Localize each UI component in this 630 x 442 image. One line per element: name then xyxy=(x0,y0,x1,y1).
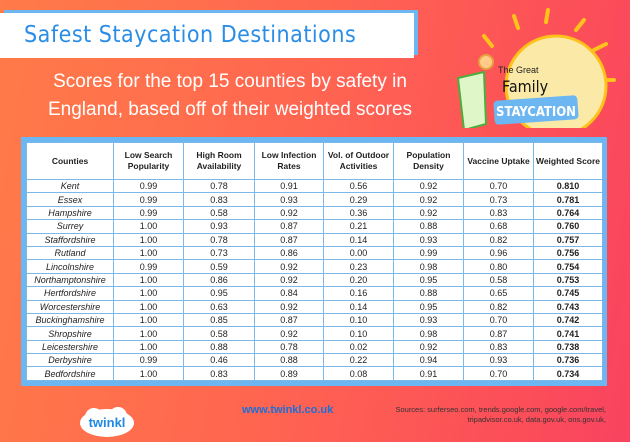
table: 0.95 xyxy=(420,302,437,312)
table: 0.73 xyxy=(490,195,507,205)
table: 0.86 xyxy=(280,248,298,258)
table: 0.73 xyxy=(210,248,228,258)
table: 0.21 xyxy=(350,221,367,231)
logo: great family staycation: Family xyxy=(502,77,549,96)
table: 0.89 xyxy=(280,369,298,379)
table: 0.753 xyxy=(557,275,579,285)
table: 1.00 xyxy=(140,275,157,285)
table: 0.82 xyxy=(490,302,507,312)
table: 0.92 xyxy=(420,342,437,352)
table: 0.93 xyxy=(280,195,298,205)
table: 0.98 xyxy=(420,262,437,272)
table: Vaccine Uptake xyxy=(467,156,530,166)
table: Hampshire xyxy=(48,208,92,218)
table: 0.22 xyxy=(350,355,367,365)
table: Population Density xyxy=(407,150,450,171)
table: 0.59 xyxy=(210,262,228,272)
table: Rutland xyxy=(54,248,86,258)
table: 1.00 xyxy=(140,235,157,245)
table: 0.99 xyxy=(140,262,157,272)
table: 0.756 xyxy=(557,248,579,258)
table: Hertfordshire xyxy=(44,288,96,298)
sources: tripadvisor.co.uk, data.gov.uk, ons.gov.uk, xyxy=(467,415,606,424)
twinkl logo xyxy=(80,407,134,437)
table: Bedfordshire xyxy=(44,369,96,379)
table: 0.08 xyxy=(350,369,367,379)
table: Low Search Popularity xyxy=(125,150,172,171)
title xyxy=(0,13,414,58)
table: 0.78 xyxy=(210,235,228,245)
table: 0.70 xyxy=(490,369,507,379)
table: 0.82 xyxy=(490,235,507,245)
table: 0.93 xyxy=(420,315,437,325)
table: 0.94 xyxy=(420,355,437,365)
table: 0.98 xyxy=(420,328,437,338)
table: Leicestershire xyxy=(42,342,98,352)
table: 0.742 xyxy=(557,315,579,325)
table: 0.23 xyxy=(350,262,367,272)
table: 0.88 xyxy=(420,288,437,298)
table: 0.736 xyxy=(557,355,579,365)
table: High Room Availability xyxy=(196,150,242,171)
website url: www.twinkl.co.uk xyxy=(242,404,333,416)
table: 0.56 xyxy=(350,181,367,191)
table: 0.99 xyxy=(420,248,437,258)
table: 0.87 xyxy=(280,221,298,231)
table: 0.83 xyxy=(210,369,228,379)
table: 0.734 xyxy=(557,369,579,379)
table: 0.78 xyxy=(280,342,298,352)
table: 0.92 xyxy=(280,302,298,312)
table: 0.36 xyxy=(350,208,367,218)
table: 0.78 xyxy=(210,181,228,191)
table: 0.738 xyxy=(557,342,579,352)
logo: great family staycation xyxy=(456,8,616,128)
table: 0.757 xyxy=(557,235,579,245)
table: 0.70 xyxy=(490,315,507,325)
table: 1.00 xyxy=(140,328,157,338)
table: 0.83 xyxy=(490,208,507,218)
table: Lincolnshire xyxy=(46,262,94,272)
table: 0.99 xyxy=(140,208,157,218)
table: 1.00 xyxy=(140,315,157,325)
table: 0.88 xyxy=(280,355,298,365)
table: 0.83 xyxy=(490,342,507,352)
table: 1.00 xyxy=(140,288,157,298)
table: Worcestershire xyxy=(40,302,100,312)
table: 0.99 xyxy=(140,195,157,205)
sources xyxy=(395,405,606,424)
table: Kent xyxy=(61,181,79,191)
table: 0.87 xyxy=(280,235,298,245)
table: Shropshire xyxy=(48,328,92,338)
logo: great family staycation: The Great xyxy=(498,65,539,75)
table: Weighted Score xyxy=(536,156,600,166)
table: 0.95 xyxy=(210,288,228,298)
table: 0.96 xyxy=(490,248,507,258)
table: 0.741 xyxy=(557,328,579,338)
table: Counties xyxy=(52,156,88,166)
table: 0.781 xyxy=(557,195,579,205)
table: 0.80 xyxy=(490,262,507,272)
table: 0.46 xyxy=(210,355,228,365)
table: 0.745 xyxy=(557,288,579,298)
table: 0.63 xyxy=(210,302,228,312)
table: Staffordshire xyxy=(44,235,96,245)
table: Northamptonshire xyxy=(34,275,106,285)
table: 0.93 xyxy=(490,355,507,365)
table: 0.93 xyxy=(420,235,437,245)
table: 0.83 xyxy=(210,195,228,205)
table: 0.88 xyxy=(420,221,437,231)
table: 0.92 xyxy=(280,328,298,338)
table: Surrey xyxy=(57,221,83,231)
table: Low Infection Rates xyxy=(262,150,316,171)
twinkl logo: twinkl xyxy=(89,415,125,430)
table: 0.10 xyxy=(350,315,367,325)
table: 0.99 xyxy=(140,355,157,365)
table: Essex xyxy=(58,195,82,205)
logo: great family staycation: STAYCATION xyxy=(496,105,576,120)
table xyxy=(21,137,607,386)
table: 0.92 xyxy=(420,208,437,218)
table: 0.95 xyxy=(420,275,437,285)
table: 0.87 xyxy=(490,328,507,338)
table: 0.88 xyxy=(210,342,228,352)
table: 0.68 xyxy=(490,221,507,231)
table: 0.14 xyxy=(350,302,367,312)
table: 0.92 xyxy=(420,195,437,205)
table: 0.92 xyxy=(280,262,298,272)
table: 0.70 xyxy=(490,181,507,191)
sources: Sources: surferseo.com, trends.google.com, google.com/travel, xyxy=(395,405,606,414)
table: 0.16 xyxy=(350,288,367,298)
table: 0.58 xyxy=(490,275,507,285)
table: 1.00 xyxy=(140,302,157,312)
table: 1.00 xyxy=(140,342,157,352)
table: Derbyshire xyxy=(48,355,92,365)
table: 0.84 xyxy=(280,288,298,298)
table: 0.743 xyxy=(557,302,579,312)
table: 0.29 xyxy=(350,195,367,205)
table: 0.00 xyxy=(350,248,367,258)
table: 0.10 xyxy=(350,328,367,338)
table: 0.754 xyxy=(557,262,579,272)
title: Safest Staycation Destinations xyxy=(24,22,356,48)
table: Vol. of Outdoor Activities xyxy=(328,150,389,171)
table: 0.14 xyxy=(350,235,367,245)
table: 0.91 xyxy=(420,369,437,379)
table: 0.85 xyxy=(210,315,228,325)
table: 1.00 xyxy=(140,221,157,231)
table: 0.92 xyxy=(280,208,298,218)
table: 0.86 xyxy=(210,275,228,285)
table: 0.20 xyxy=(350,275,367,285)
table: 0.764 xyxy=(557,208,579,218)
table: 0.760 xyxy=(557,221,579,231)
table: 0.92 xyxy=(280,275,298,285)
table: 0.99 xyxy=(140,181,157,191)
table: 0.91 xyxy=(280,181,298,191)
table: 0.58 xyxy=(210,328,228,338)
table: 0.58 xyxy=(210,208,228,218)
table: 1.00 xyxy=(140,369,157,379)
table: 0.65 xyxy=(490,288,507,298)
table: 1.00 xyxy=(140,248,157,258)
table: 0.92 xyxy=(420,181,437,191)
table: 0.02 xyxy=(350,342,367,352)
table: 0.87 xyxy=(280,315,298,325)
subtitle: Scores for the top 15 counties by safety in England, based off of their weighted scores xyxy=(48,71,412,120)
table: 0.93 xyxy=(210,221,228,231)
table: 0.810 xyxy=(557,181,579,191)
table: Buckinghamshire xyxy=(35,315,105,325)
